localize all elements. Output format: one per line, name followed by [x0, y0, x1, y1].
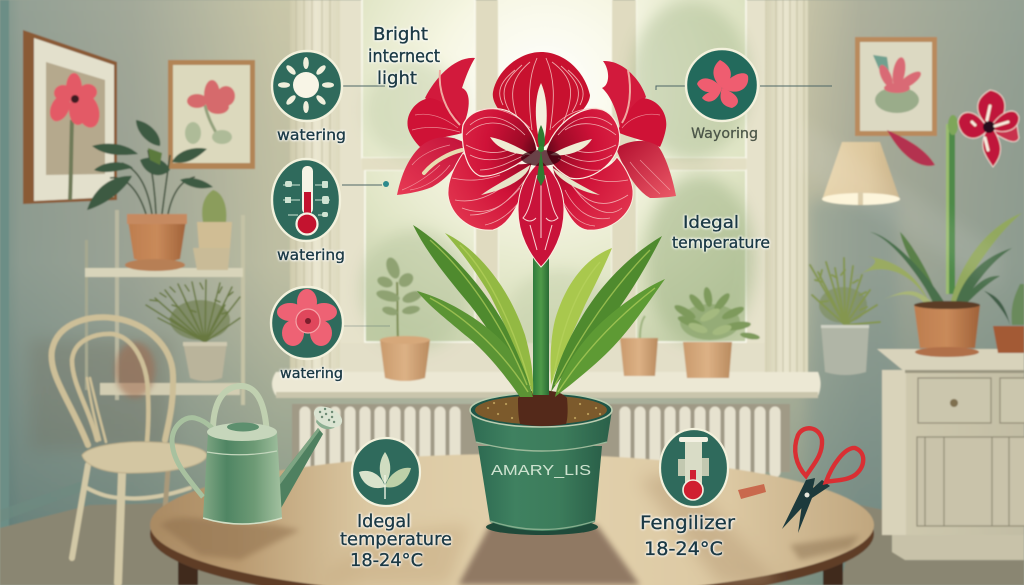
can spout [272, 428, 323, 512]
window sill pot middle [620, 316, 658, 376]
side bloom right [602, 61, 676, 198]
lower right petal [552, 157, 633, 230]
label: watering 3: watering [280, 366, 343, 382]
badge: fertilizer tube [660, 429, 728, 507]
right curtain trim [760, 0, 808, 376]
upper right petal [546, 108, 620, 179]
badge: bright light sun [272, 51, 342, 121]
label: watering 1: watering [277, 126, 346, 144]
window sill [272, 372, 820, 398]
flower throat [521, 146, 561, 186]
table shadows [160, 470, 860, 585]
amaryllis plant right [852, 90, 1022, 357]
pot label: AMARY_LIS [491, 462, 591, 479]
potted plant lower shelf [146, 280, 240, 381]
window sill plant left [375, 256, 430, 381]
potted plant top shelf [87, 120, 213, 271]
cabinet door [917, 437, 1024, 526]
watering can [172, 386, 345, 524]
badge: red flower upper right [686, 49, 758, 121]
main amaryllis pot and plant [397, 52, 676, 535]
table top [150, 454, 874, 585]
label: Bright internect light [368, 24, 440, 89]
leader lines [341, 86, 832, 326]
label: Idegal temperature 18-24C: Idegal [357, 511, 411, 532]
red eraser item on table [738, 484, 766, 499]
table [150, 454, 874, 585]
sun rays [800, 120, 1000, 290]
leader dot [383, 181, 389, 187]
label: Idegal temperature 18-24C [340, 511, 452, 571]
window panes [362, 0, 746, 344]
badge: pink flower [271, 287, 343, 359]
right plant pot [914, 301, 980, 357]
label: Wayoring: Wayoring [691, 126, 758, 142]
wall frame centre [168, 60, 255, 169]
lower left petal [448, 153, 532, 230]
chair back [52, 317, 173, 445]
label: Bright internect light: Bright [373, 24, 428, 45]
right plant bud [887, 130, 935, 166]
can lid [207, 423, 277, 441]
table rim [150, 462, 874, 585]
window [340, 0, 765, 372]
chair seat [82, 442, 207, 473]
right plant stem [946, 124, 955, 294]
soil [475, 389, 607, 426]
window sill plant right [673, 286, 760, 378]
scissor blades [782, 478, 830, 533]
shelf unit [85, 210, 245, 405]
gray pot plant [810, 258, 880, 375]
label: Idegal temperature upper [672, 213, 770, 252]
badge: leaf [352, 438, 420, 506]
label: watering 2: watering [277, 246, 345, 264]
label: Fengilizer 18-24C: Fengilizer [640, 512, 735, 534]
scissor handles [795, 428, 863, 482]
scissors [782, 428, 863, 533]
label: Idegal temperature upper: temperature [672, 233, 770, 252]
cabinet [877, 349, 1024, 560]
cabinet drawer [918, 378, 1024, 423]
pot shadow base [486, 519, 598, 535]
label: Fengilizer 18-24C: 18-24°C [644, 538, 723, 560]
label: Idegal temperature 18-24C: temperature [340, 529, 452, 550]
flower stem [533, 255, 549, 395]
upper left petal [462, 108, 537, 176]
lamp [822, 142, 900, 205]
label: Idegal temperature 18-24C: 18-24°C [350, 550, 423, 571]
left curtain trim [290, 0, 342, 372]
side bloom left [397, 58, 475, 195]
chair legs [72, 465, 190, 583]
label: Idegal temperature upper: Idegal [683, 213, 739, 233]
can head [311, 403, 345, 431]
label: Bright internect light: internect [368, 46, 440, 67]
table legs [178, 550, 843, 585]
bottom petal [518, 160, 564, 267]
leaves [413, 225, 665, 397]
badge: thermometer [272, 159, 340, 241]
right plant flower [958, 90, 1019, 167]
background red object seen through chair [115, 342, 155, 398]
floor [0, 500, 1024, 585]
can body [203, 432, 282, 524]
pot body [478, 446, 602, 531]
flower [397, 52, 676, 267]
can handle back [172, 418, 212, 497]
small plant far right [982, 284, 1024, 353]
label: Fengilizer 18-24C [640, 512, 735, 560]
pot rim [470, 410, 612, 451]
wall frame left [23, 30, 117, 204]
wall frame right [855, 37, 937, 136]
label: Bright internect light: light [377, 68, 417, 89]
right plant leaves [852, 213, 1022, 305]
can handle top [213, 386, 267, 437]
top petal [493, 52, 590, 150]
chair [52, 317, 207, 583]
small pots top shelf [193, 190, 232, 270]
radiator [292, 404, 790, 472]
